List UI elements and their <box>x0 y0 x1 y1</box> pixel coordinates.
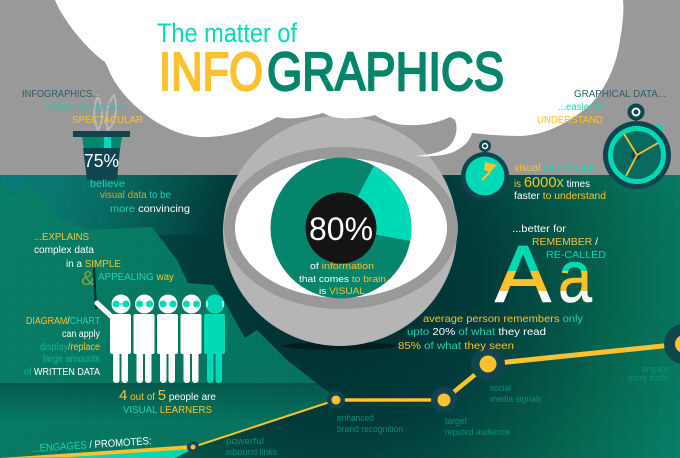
cup lid <box>73 131 130 137</box>
person 2 <box>134 294 154 383</box>
label: engage more traffic <box>628 364 670 383</box>
text: better for: ...better for <box>512 224 567 235</box>
pie: 20 percent segment <box>341 166 411 241</box>
text: UNDERSTAND: UNDERSTAND <box>537 115 603 126</box>
label: target reputed audience: reputed audience <box>445 427 510 437</box>
section: diagram text <box>24 316 100 378</box>
caption line 3: is VISUAL <box>319 286 365 297</box>
cup upper <box>82 137 122 149</box>
stopwatch knob <box>628 104 644 125</box>
label: target reputed audience <box>445 416 510 437</box>
caption line 2: that comes to brain <box>299 274 386 285</box>
title <box>157 18 504 102</box>
text: complex data: complex data <box>34 245 94 256</box>
text: REMEMBER: REMEMBER / <box>532 237 598 248</box>
background: teal lower area <box>0 175 680 458</box>
label: social media signals: social <box>490 383 511 393</box>
person 4 <box>180 294 202 383</box>
text: can apply: can apply <box>62 329 100 340</box>
text: average person: average person remembers only <box>423 313 584 325</box>
icon: steam <box>94 95 116 130</box>
stat: 4 out of 5 <box>119 387 216 416</box>
label: social media signals <box>490 383 542 404</box>
label: powerful inbound links: powerful <box>226 436 264 446</box>
value: 75%: 75% <box>84 151 119 171</box>
node 3 <box>431 387 457 413</box>
background: dark band under people <box>0 383 336 422</box>
stopwatch hands <box>624 134 658 176</box>
stopwatch button <box>656 124 662 132</box>
text: believe: believe <box>90 178 125 190</box>
text: is 6000x times: is 6000x times <box>514 174 590 191</box>
background: gray upper area <box>0 0 680 176</box>
line chart <box>0 324 680 458</box>
chart labels <box>226 364 670 457</box>
person 5 <box>204 294 225 383</box>
text: more convincing: more convincing <box>110 203 190 215</box>
eye sphere <box>223 116 458 350</box>
eye caption <box>299 261 386 297</box>
label: target reputed audience: target <box>445 416 467 426</box>
text: easier to: ...easier to <box>558 102 603 113</box>
icon: large stopwatch <box>603 104 671 189</box>
background: blue-teal upper left glow <box>0 175 230 235</box>
sphere ground shadow <box>283 342 397 350</box>
icon: small stopwatch <box>461 140 509 200</box>
icon: cup <box>73 131 130 180</box>
chart line segment 4 <box>488 344 680 364</box>
chart start wedge <box>0 445 193 458</box>
section: graphical data text <box>537 89 666 126</box>
background: green mountain shape <box>0 178 336 458</box>
text: visual information: visual information <box>514 163 595 174</box>
heading line 1: INFOGRAPHICS... <box>22 89 100 100</box>
section: better for <box>495 224 606 320</box>
section: 6000x text <box>514 163 606 202</box>
cup stripe <box>104 137 111 149</box>
person 3 <box>157 294 178 383</box>
letters: Aa <box>495 230 593 320</box>
text: 85%: 85% of what they seen <box>398 340 514 352</box>
heading: engages / promotes: ...ENGAGES / PROMOTES: <box>31 435 152 455</box>
stat line 2: VISUAL LEARNERS <box>123 405 212 416</box>
text: in a SIMPLE: in a SIMPLE <box>66 259 121 270</box>
speech cloud <box>55 0 623 156</box>
text: of WRITTEN DATA: of WRITTEN DATA <box>24 367 100 378</box>
small stopwatch wedge <box>484 162 497 172</box>
small stopwatch case <box>461 152 509 200</box>
title line: The matter of: The matter of <box>157 18 297 48</box>
small stopwatch knob <box>479 140 491 152</box>
small stopwatch hand <box>482 172 490 180</box>
text: upto 20%: upto 20% of what they read <box>407 326 546 338</box>
section: explains <box>34 232 174 290</box>
iris pie chart <box>270 158 412 298</box>
label: enhanced brand recognition <box>337 413 403 434</box>
chart line segment 3 <box>444 364 488 400</box>
title word: GRAPHICS: GRAPHICS <box>267 42 504 102</box>
heading line 3: SPECTACULAR <box>72 115 143 126</box>
icon: five people <box>94 268 225 383</box>
small stopwatch button <box>496 154 502 160</box>
value: 80%: 80% <box>309 211 373 247</box>
label: engage more traffic: engage <box>642 364 670 374</box>
label: engage more traffic: more traffic <box>628 373 670 383</box>
chart line segment 2 <box>336 398 444 402</box>
stopwatch case <box>603 121 671 189</box>
text: ampersand: & <box>81 268 96 290</box>
caption line 1: of information <box>310 261 374 272</box>
letter A: A <box>495 230 551 320</box>
cup lower <box>83 148 120 180</box>
title word: INFO: INFO <box>159 42 263 102</box>
stopwatch ring <box>610 128 664 182</box>
stat line 1: 4 out of 5 people are <box>119 387 216 404</box>
pupil <box>306 192 376 264</box>
text: large amounts: large amounts <box>43 354 100 365</box>
background: grid lines <box>0 175 680 458</box>
text: visual data to be: visual data to be <box>100 190 171 201</box>
text: faster to understand: faster to understand <box>514 191 606 202</box>
node 5 <box>664 324 680 364</box>
text: GRAPHICAL DATA: GRAPHICAL DATA... <box>574 89 666 100</box>
pointer stick <box>94 268 96 309</box>
pie: 80 percent segment <box>270 158 412 298</box>
text: EXPLAINS: ...EXPLAINS <box>34 232 89 243</box>
node 1 <box>187 441 199 453</box>
chart line <box>193 400 336 447</box>
section: remember stats <box>398 313 584 352</box>
label: social media signals: media signals <box>490 394 542 404</box>
label: enhanced brand recognition: enhanced <box>337 413 374 423</box>
heading line 2: ...makes boring data <box>38 102 124 113</box>
white of the eye <box>235 158 447 298</box>
text: DIAGRAM/CHART: DIAGRAM/CHART <box>26 316 100 327</box>
text: APPEALING way: APPEALING way <box>98 272 174 283</box>
eye socket ring <box>224 147 458 309</box>
node 2 <box>327 391 345 409</box>
small stopwatch face <box>466 156 504 196</box>
text: RE-CALLED: RE-CALLED <box>546 250 606 261</box>
node 4 <box>471 347 505 381</box>
letter a: a <box>558 235 593 318</box>
person 1 <box>110 294 131 383</box>
label: powerful inbound links <box>226 436 277 457</box>
person 1 arm <box>97 303 112 317</box>
section: spectacular <box>22 89 190 215</box>
chart start teal strip <box>0 449 193 458</box>
text: display/replace: display/replace <box>40 342 100 353</box>
label: powerful inbound links: inbound links <box>226 447 277 457</box>
label: enhanced brand recognition: brand recognition <box>337 424 403 434</box>
sphere body <box>223 116 457 346</box>
